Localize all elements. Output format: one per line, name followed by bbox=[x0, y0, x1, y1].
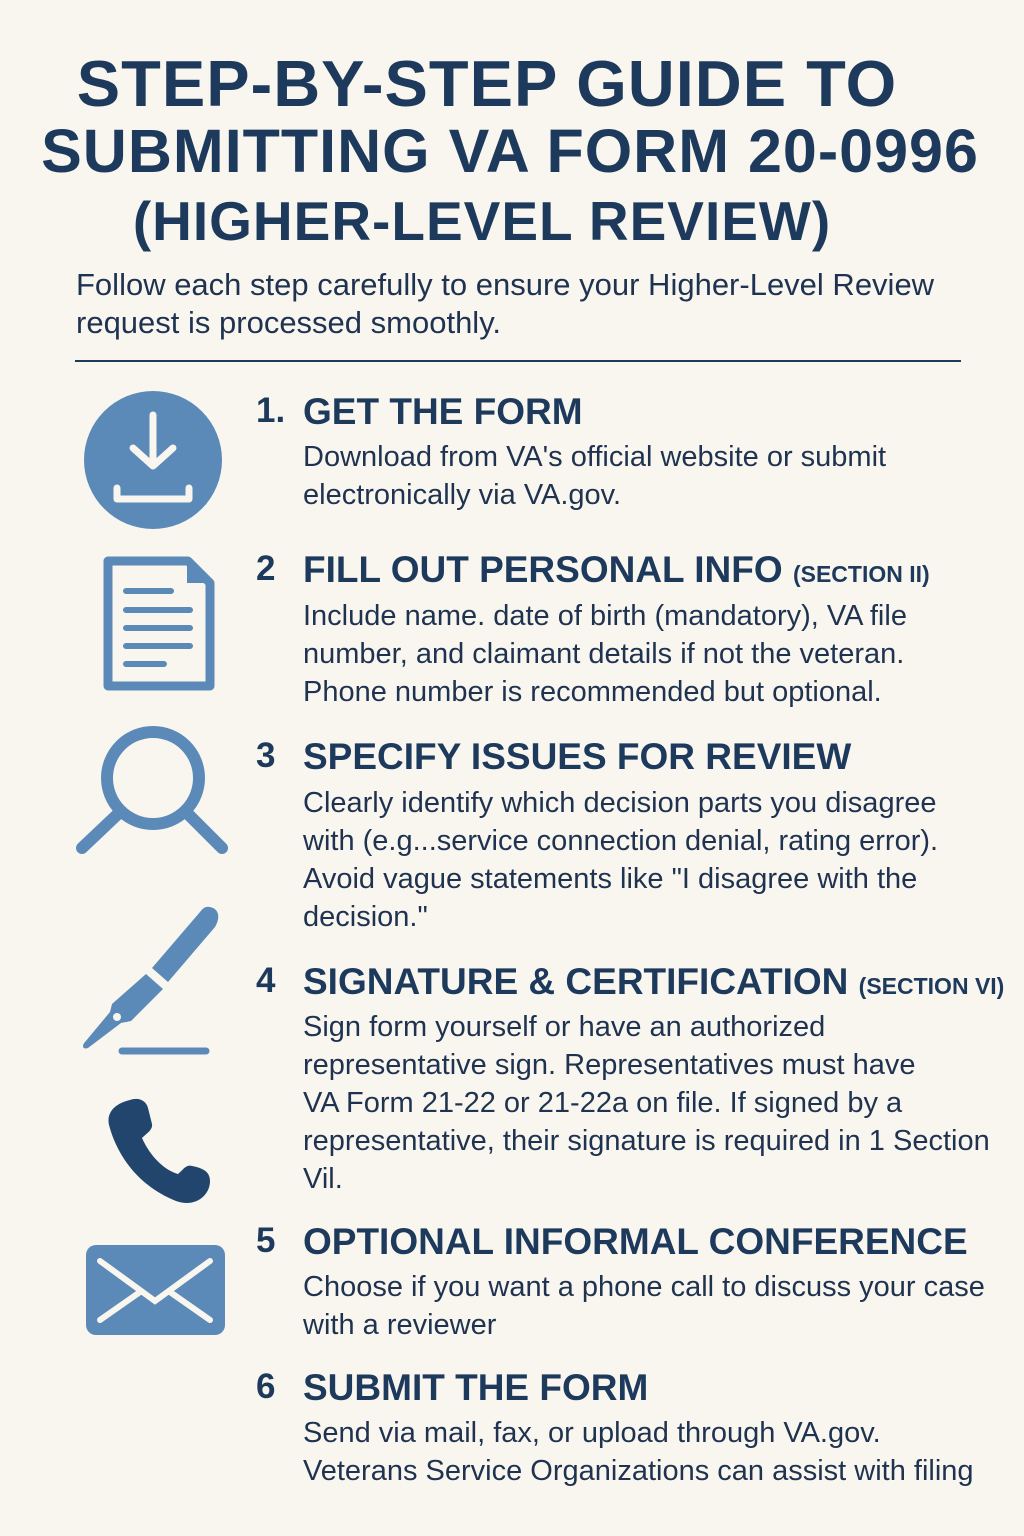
subtitle bbox=[76, 267, 934, 340]
step 3: SPECIFY ISSUES FOR REVIEW bbox=[303, 736, 851, 777]
step 5: with a reviewer bbox=[303, 1309, 496, 1341]
step 5: Choose if you want a phone call to discuss your case bbox=[303, 1271, 985, 1303]
step 5: OPTIONAL INFORMAL CONFERENCE bbox=[303, 1221, 968, 1262]
step 3: 3 bbox=[256, 736, 275, 775]
icon: magnifier bbox=[76, 726, 228, 854]
icon: pen bbox=[83, 906, 218, 1054]
step 4: representative sign. Representatives must have bbox=[303, 1049, 916, 1081]
icon: document bbox=[104, 556, 214, 690]
step 5: 5 bbox=[256, 1221, 275, 1260]
title: STEP-BY-STEP GUIDE TO bbox=[77, 47, 897, 120]
step 6: Veterans Service Organizations can assist with filing bbox=[303, 1455, 974, 1487]
title: (HIGHER-LEVEL REVIEW) bbox=[133, 190, 831, 252]
step 6 bbox=[256, 1367, 974, 1487]
title: SUBMITTING VA FORM 20-0996 bbox=[41, 117, 979, 185]
step 2: FILL OUT PERSONAL INFO (SECTION II) bbox=[303, 549, 930, 590]
step 1: GET THE FORM bbox=[303, 391, 583, 432]
step 1: electronically via VA.gov. bbox=[303, 479, 621, 511]
step 2: Phone number is recommended but optional. bbox=[303, 676, 882, 708]
step 4 bbox=[256, 961, 1004, 1195]
step 2 bbox=[256, 549, 930, 708]
step 2: number, and claimant details if not the veteran. bbox=[303, 638, 904, 670]
step 2: Include name. date of birth (mandatory), VA file bbox=[303, 600, 907, 632]
step 4: VA Form 21-22 or 21-22a on file. If signed by a bbox=[303, 1087, 902, 1119]
subtitle: Follow each step carefully to ensure your Higher-Level Review bbox=[76, 267, 934, 302]
step 3: Avoid vague statements like "I disagree with the bbox=[303, 863, 917, 895]
step 4: Vil. bbox=[303, 1163, 343, 1195]
step 3: decision." bbox=[303, 901, 428, 933]
step 3 bbox=[256, 736, 938, 933]
step 1 bbox=[256, 391, 886, 511]
step 2: 2 bbox=[256, 549, 275, 588]
step 1: Download from VA's official website or submit bbox=[303, 441, 886, 473]
icon: envelope bbox=[86, 1245, 225, 1335]
icon: download bbox=[84, 391, 222, 529]
step 6: SUBMIT THE FORM bbox=[303, 1367, 648, 1408]
step 4: Sign form yourself or have an authorized bbox=[303, 1011, 825, 1043]
step 3: Clearly identify which decision parts you disagree bbox=[303, 787, 936, 819]
step 4: representative, their signature is required in 1 Section bbox=[303, 1125, 990, 1157]
step 6: 6 bbox=[256, 1367, 275, 1406]
step 3: with (e.g...service connection denial, rating error). bbox=[303, 825, 938, 857]
step 6: Send via mail, fax, or upload through VA.gov. bbox=[303, 1417, 881, 1449]
title bbox=[41, 47, 979, 252]
step 4: SIGNATURE & CERTIFICATION (SECTION VI) bbox=[303, 961, 1004, 1002]
step 4: 4 bbox=[256, 961, 275, 1000]
step 1: 1. bbox=[256, 391, 285, 430]
icon: phone bbox=[108, 1098, 210, 1203]
subtitle: request is processed smoothly. bbox=[76, 305, 501, 340]
step 5 bbox=[256, 1221, 985, 1341]
